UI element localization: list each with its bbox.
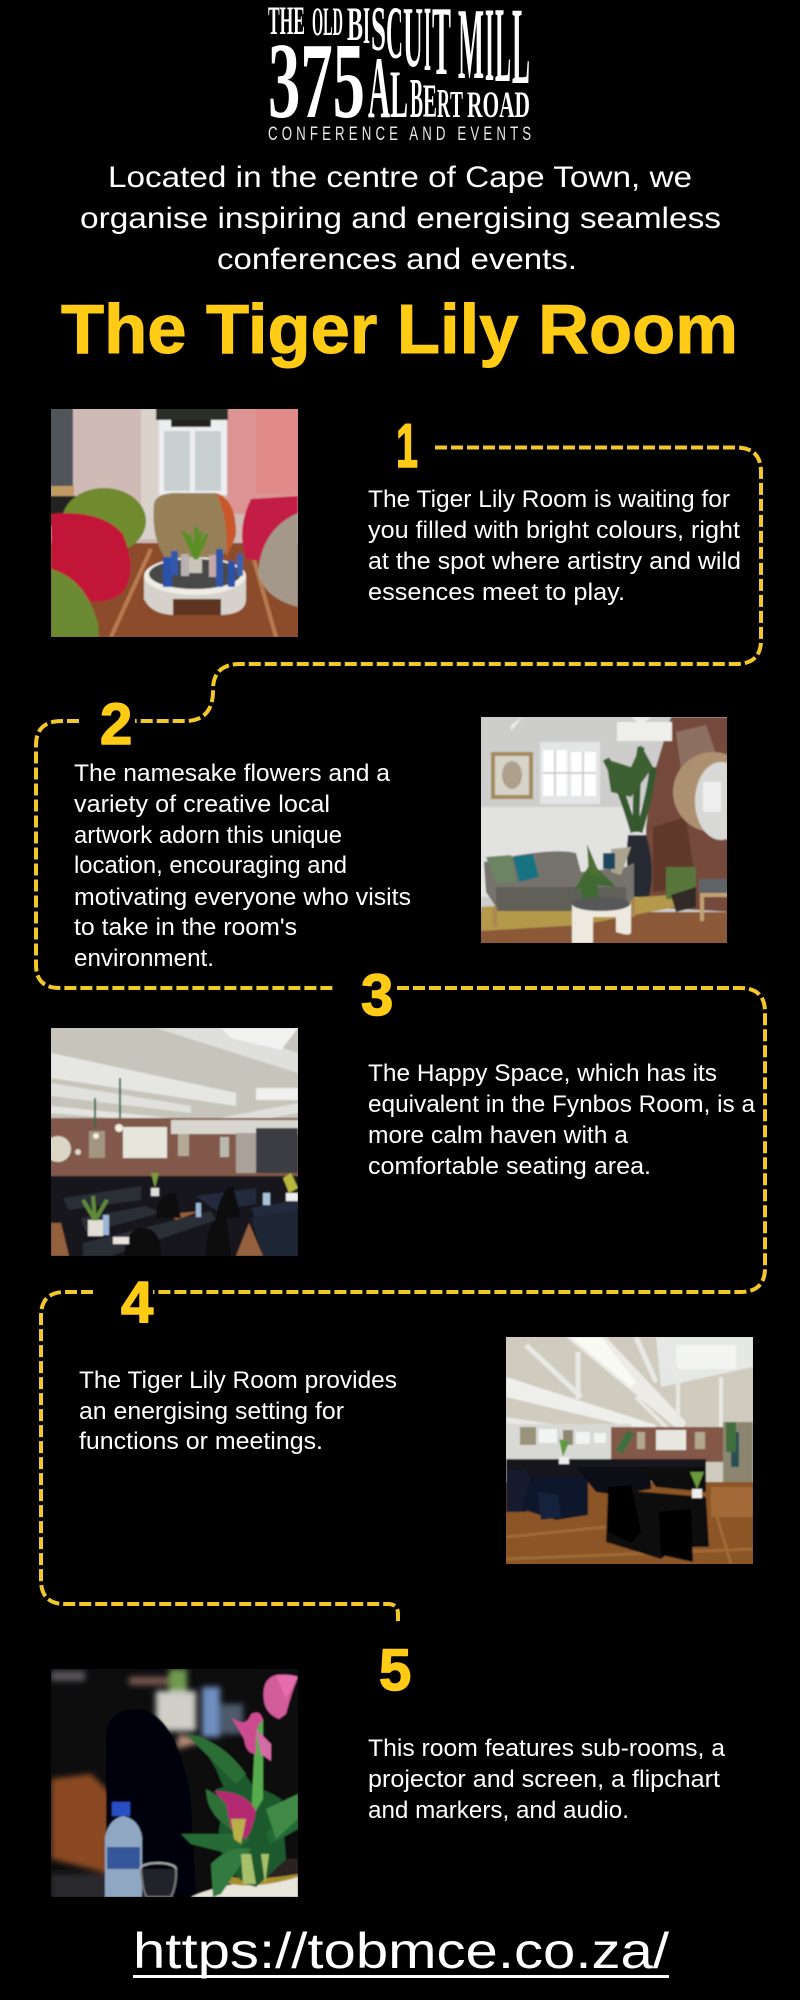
description 5: projector and screen, a flipchart xyxy=(368,1766,720,1793)
description 2 xyxy=(74,760,411,972)
description 3 xyxy=(368,1060,756,1180)
number 4: 4 xyxy=(121,1270,153,1335)
step 4 xyxy=(79,1270,758,1570)
photo: conference room with wooden floor xyxy=(506,1337,753,1564)
logo: The Old Biscuit Mill 375 Albert Road: CONFERENCE AND EVENTS xyxy=(268,122,531,145)
description 4 xyxy=(79,1367,397,1455)
description 3: equivalent in the Fynbos Room, is a xyxy=(368,1091,756,1118)
description 1: essences meet to play. xyxy=(368,579,625,606)
description 2: The namesake flowers and a xyxy=(74,760,391,787)
logo: The Old Biscuit Mill 375 Albert Road: A xyxy=(368,40,390,137)
description 3: more calm haven with a xyxy=(368,1122,629,1149)
description 4: an energising setting for xyxy=(79,1398,344,1425)
description 1 xyxy=(368,486,741,606)
photo: conference room with blue tables xyxy=(51,1028,298,1256)
number 1: 1 xyxy=(396,412,418,481)
step 1 xyxy=(46,404,741,643)
description 2: location, encouraging and xyxy=(74,852,347,879)
description 3: The Happy Space, which has its xyxy=(368,1060,717,1087)
description 4: functions or meetings. xyxy=(79,1428,323,1455)
description 2: motivating everyone who visits xyxy=(74,884,411,911)
title: The Tiger Lily Room xyxy=(61,290,738,368)
intro text xyxy=(80,161,721,276)
logo: The Old Biscuit Mill 375 Albert Road: 375 xyxy=(268,22,365,141)
description 2: environment. xyxy=(74,945,214,972)
logo: The Old Biscuit Mill 375 Albert Road: ROAD xyxy=(467,85,530,126)
description 2: to take in the room's xyxy=(74,914,297,941)
intro text: Located in the centre of Cape Town, we xyxy=(108,161,692,194)
intro text: conferences and events. xyxy=(217,243,577,276)
website link: https://tobmce.co.za/ xyxy=(133,1923,669,1979)
number 5: 5 xyxy=(379,1638,411,1703)
description 2: variety of creative local xyxy=(74,791,330,818)
logo: The Old Biscuit Mill 375 Albert Road: OLD xyxy=(312,0,343,44)
description 4: The Tiger Lily Room provides xyxy=(79,1367,397,1394)
description 5: This room features sub-rooms, a xyxy=(368,1735,726,1762)
number 3: 3 xyxy=(361,963,393,1028)
number 2: 2 xyxy=(100,692,132,757)
logo: The Old Biscuit Mill 375 Albert Road xyxy=(268,0,531,145)
description 3: comfortable seating area. xyxy=(368,1153,651,1180)
dashed connector path xyxy=(36,448,765,1625)
photo: bean bag lounge xyxy=(51,409,298,637)
step 2 xyxy=(74,692,753,972)
description 5: and markers, and audio. xyxy=(368,1797,629,1824)
description 5 xyxy=(368,1735,726,1824)
logo: The Old Biscuit Mill 375 Albert Road: L xyxy=(390,56,408,132)
logo: The Old Biscuit Mill 375 Albert Road: T xyxy=(450,84,463,126)
step 3 xyxy=(45,963,756,1261)
description 1: at the spot where artistry and wild xyxy=(368,548,741,575)
description 1: The Tiger Lily Room is waiting for xyxy=(368,486,730,513)
logo: The Old Biscuit Mill 375 Albert Road: B xyxy=(410,68,423,130)
logo: The Old Biscuit Mill 375 Albert Road: E xyxy=(423,75,437,128)
intro text: organise inspiring and energising seamless xyxy=(80,202,721,235)
logo: The Old Biscuit Mill 375 Albert Road: R xyxy=(437,80,450,126)
description 1: you filled with bright colours, right xyxy=(368,517,740,544)
photo: pink calla lily and water bottle xyxy=(51,1669,298,1897)
description 2: artwork adorn this unique xyxy=(74,822,342,849)
photo: sofa and brick wall xyxy=(481,717,727,943)
step 5 xyxy=(46,1638,726,1902)
